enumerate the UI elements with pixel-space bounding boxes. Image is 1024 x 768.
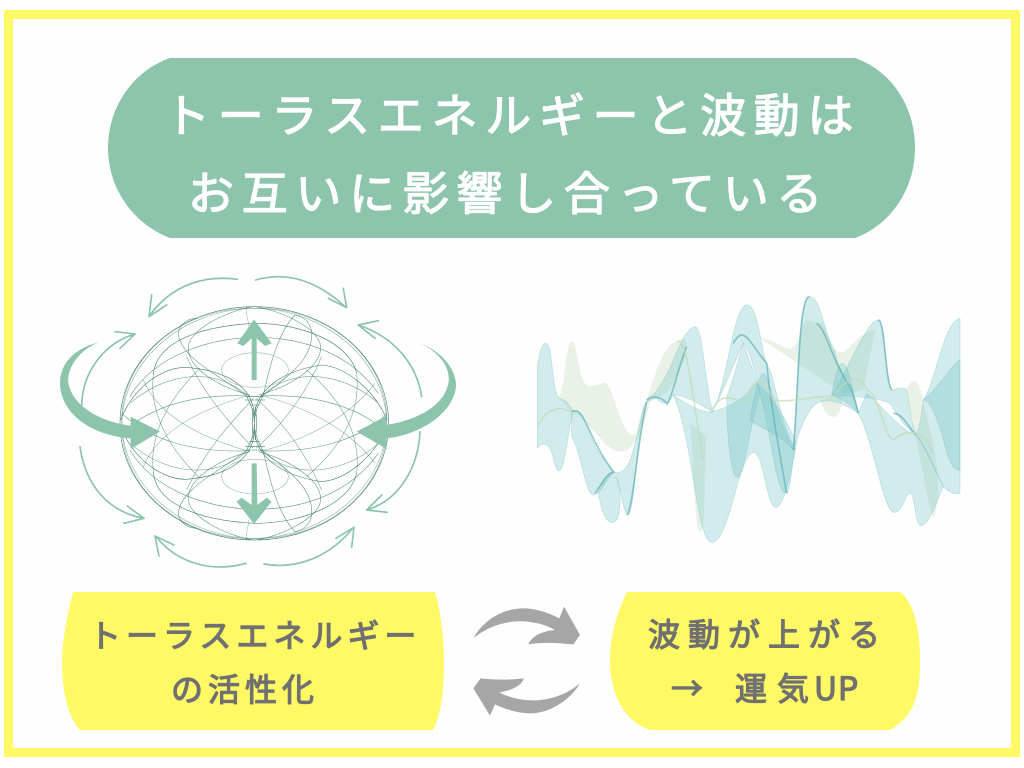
- pale green ribbon: [537, 341, 933, 460]
- arrow: clockwise top: [473, 607, 580, 644]
- arrow: down: [237, 463, 272, 524]
- box: torus energy activation: [62, 592, 444, 730]
- title line 2: お互いに影響し合っている: [188, 168, 830, 220]
- teal translucent layers: [537, 297, 960, 542]
- title banner: [108, 58, 915, 238]
- box text line 1: 波動が上がる: [648, 617, 888, 653]
- cycle arrows: [473, 607, 580, 716]
- pale green back layer: [558, 320, 938, 533]
- box text line 2: → 運気UP: [671, 664, 858, 710]
- title line 1: トーラスエネルギーと波動は: [164, 90, 861, 142]
- torus diagram: [60, 277, 456, 567]
- large arrow: left: [60, 342, 160, 449]
- circulating thin arrows: [80, 277, 422, 567]
- arrow: clockwise bottom: [473, 678, 580, 716]
- box text line 1: トーラスエネルギー: [89, 618, 421, 654]
- torus wireframe: [114, 299, 395, 547]
- darker seams: [572, 297, 916, 515]
- large arrow: right: [357, 342, 456, 449]
- box: wave rises: [610, 592, 920, 730]
- wave graphic: [537, 297, 960, 542]
- box text line 2: の活性化: [171, 672, 319, 708]
- arrow: up: [237, 319, 272, 380]
